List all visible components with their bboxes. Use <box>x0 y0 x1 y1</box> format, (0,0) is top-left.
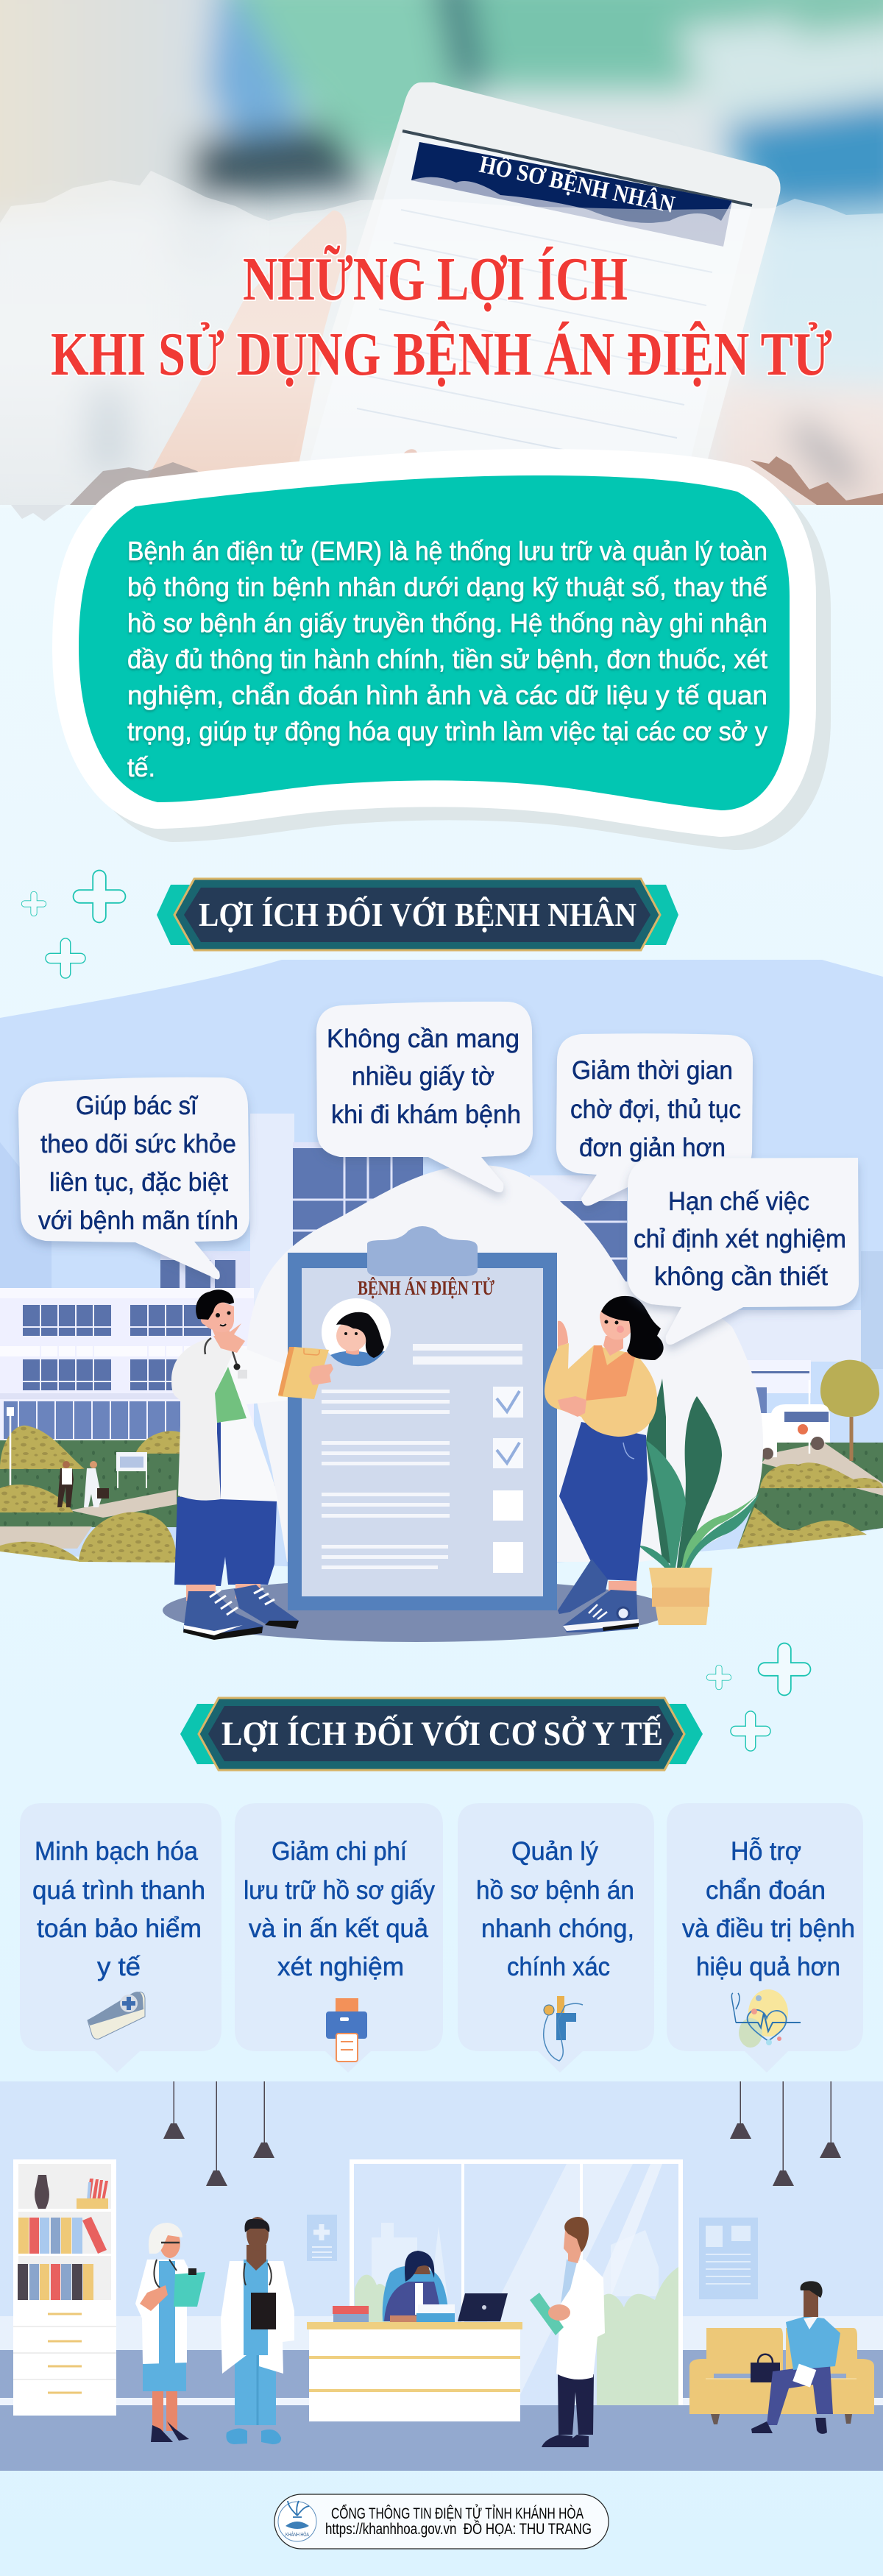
card 4: effective diagnosis and treatment: Hỗ trợ <box>731 1837 801 1866</box>
footer text: CỔNG THÔNG TIN ĐIỆN TỬ TỈNH KHÁNH HÒA <box>331 2505 584 2522</box>
title: NHỮNG LỢI ÍCH <box>243 244 628 314</box>
coat left <box>171 1338 234 1501</box>
speech bubble 2: nhiều giấy tờ <box>352 1062 494 1091</box>
sofa <box>689 2328 874 2424</box>
card 3: fast record management: Quản lý <box>511 1837 598 1866</box>
speech bubble 4: chỉ định xét nghiệm <box>634 1225 846 1253</box>
hand holding tablet <box>132 210 347 505</box>
intro text: bộ thông tin bệnh nhân dưới dạng kỹ thuật số, thay thế <box>127 572 767 602</box>
card 1: transparent insurance payment: toán bảo hiểm <box>37 1914 202 1943</box>
speech bubble 3: Giảm thời gian <box>572 1056 733 1085</box>
title <box>51 244 832 389</box>
footer badge <box>274 2494 609 2549</box>
intro text: Bệnh án điện tử (EMR) là hệ thống lưu trữ và quản lý toàn <box>127 536 767 566</box>
speech bubble 4: không cần thiết <box>654 1262 828 1291</box>
ambulance <box>759 1404 830 1459</box>
speech bubble 1: với bệnh mãn tính <box>38 1206 238 1235</box>
heading: benefits for healthcare facilities: LỢI ÍCH ĐỐI VỚI CƠ SỞ Y TẾ <box>221 1714 663 1753</box>
right buildings <box>717 1310 861 1424</box>
card 3: fast record management: nhanh chóng, <box>481 1914 634 1943</box>
logo: Khánh Hòa <box>278 2501 316 2541</box>
character: patient woman <box>545 1296 664 1632</box>
torn paper overlay <box>0 171 883 508</box>
head <box>603 1336 623 1356</box>
intro text: tế. <box>127 752 155 782</box>
central glass tower <box>293 1142 627 1315</box>
right coat front and arm <box>221 1347 287 1501</box>
desk <box>307 2293 522 2421</box>
icon: plus group left <box>24 877 119 973</box>
heading: benefits for healthcare facilities <box>180 1698 703 1770</box>
intro text: nghiệm, chẩn đoán hình ảnh và các dữ liệu y tế quan <box>127 680 767 710</box>
garden right <box>737 1360 883 1549</box>
card 4: effective diagnosis and treatment: và điều trị bệnh <box>682 1914 855 1943</box>
speech bubble 1: theo dõi sức khỏe <box>40 1130 236 1158</box>
shirt <box>215 1367 247 1423</box>
illustration: hospital reception <box>0 2081 883 2471</box>
folder <box>278 1347 329 1399</box>
record lines <box>322 1344 522 1569</box>
speech bubble 2 <box>316 1002 533 1192</box>
heading: benefits for patients: LỢI ÍCH ĐỐI VỚI BỆNH NHÂN <box>199 895 636 933</box>
card 2: reduced paper costs: lưu trữ hồ sơ giấy <box>244 1876 435 1905</box>
speech bubble 1: liên tục, đặc biệt <box>49 1168 228 1197</box>
intro text: đầy đủ thông tin hành chính, tiền sử bệnh, đơn thuốc, xét <box>127 644 767 674</box>
heading: benefits for patients <box>157 879 678 950</box>
icon: insurance card <box>88 1992 145 2039</box>
card 2: reduced paper costs <box>235 1803 443 2073</box>
reception window <box>350 2159 683 2405</box>
doctor: man with tablet <box>530 2217 605 2447</box>
shoes <box>558 1559 608 1614</box>
speech bubble 1: Giúp bác sĩ <box>76 1091 199 1120</box>
wall signs <box>307 2215 758 2299</box>
card 1: transparent insurance payment: quá trình thanh <box>32 1876 205 1905</box>
reception chair and receptionist <box>383 2251 449 2322</box>
head <box>212 1328 230 1343</box>
card 3: fast record management: hồ sơ bệnh án <box>476 1876 634 1905</box>
card 4: effective diagnosis and treatment: hiệu quả hơn <box>696 1953 840 1981</box>
clipboard: electronic medical record <box>288 1226 557 1610</box>
hand on belly <box>558 1396 586 1417</box>
icon: plus group right <box>709 1649 804 1746</box>
speech bubble 3 <box>556 1033 753 1206</box>
pants <box>559 1422 648 1581</box>
bookshelf <box>13 2159 116 2416</box>
speech bubble 3: chờ đợi, thủ tục <box>570 1095 741 1124</box>
speech bubble 4: Hạn chế việc <box>668 1187 809 1216</box>
card 4: effective diagnosis and treatment <box>667 1803 863 2073</box>
plant in pot <box>639 1379 760 1625</box>
sweater <box>545 1343 657 1437</box>
card 1: transparent insurance payment: y tế <box>97 1953 141 1981</box>
speech bubble 2: Không cần mang <box>327 1025 519 1053</box>
card 2: reduced paper costs: xét nghiệm <box>277 1953 404 1981</box>
intro text <box>127 536 767 782</box>
card 1: transparent insurance payment: Minh bạch hóa <box>35 1837 199 1866</box>
card 2: reduced paper costs: và in ấn kết quả <box>249 1914 429 1943</box>
pants <box>174 1418 277 1586</box>
card 2: reduced paper costs: Giảm chi phí <box>272 1837 407 1866</box>
avatar of patient <box>322 1298 391 1366</box>
large white cloud behind clipboard <box>247 1165 763 1562</box>
tiny people <box>57 1461 109 1507</box>
footer text <box>325 2505 592 2538</box>
torn bottom edge <box>11 456 883 521</box>
character: doctor with folder <box>171 1289 333 1640</box>
hand at chin <box>213 1323 245 1353</box>
hanging lamps <box>163 2081 841 2186</box>
doctor: man in scrubs <box>221 2217 294 2444</box>
card 1: transparent insurance payment <box>20 1803 221 2073</box>
hand on folder <box>309 1364 333 1385</box>
footer text: https://khanhhoa.gov.vn ĐỒ HỌA: THU TRANG <box>325 2520 592 2538</box>
card 3: fast record management: chính xác <box>507 1953 610 1981</box>
speech bubble 4 <box>628 1158 859 1345</box>
waiting man with bag <box>751 2281 840 2434</box>
icon: medical cross with cable <box>544 1996 583 2061</box>
logo: Khánh Hòa: KHÁNH HÒA <box>286 2531 309 2538</box>
speech bubble 3: đơn giản hơn <box>579 1133 726 1162</box>
stethoscope <box>205 1338 237 1365</box>
speech bubble 1 <box>18 1078 249 1279</box>
tablet header text: HỒ SƠ BỆNH NHÂN <box>477 149 678 219</box>
card 4: effective diagnosis and treatment: chẩn đoán <box>706 1876 826 1905</box>
checkboxes <box>493 1387 523 1573</box>
tablet <box>283 82 781 486</box>
card 3: fast record management <box>458 1803 654 2073</box>
icon: heart with stethoscope <box>731 1989 801 2048</box>
illustration: patient scene background <box>0 960 883 1571</box>
intro text: hồ sơ bệnh án giấy truyền thống. Hệ thống này ghi nhận <box>127 608 767 638</box>
hospital building left <box>0 1114 294 1443</box>
speech bubble 2: khi đi khám bệnh <box>331 1100 521 1129</box>
icon: printer <box>326 1998 367 2062</box>
intro text: trọng, giúp tự động hóa quy trình làm việc tại các cơ sở y <box>127 716 767 746</box>
panel: intro definition <box>79 475 804 824</box>
shoes <box>234 1585 299 1627</box>
illustration: ground shadow <box>163 1579 670 1642</box>
hero photo: tablet in hands <box>0 0 883 530</box>
raised hand <box>558 1321 568 1347</box>
doctor: elderly woman <box>135 2223 205 2442</box>
garden left <box>0 1407 180 1563</box>
clipboard title: BỆNH ÁN ĐIỆN TỬ <box>358 1277 494 1299</box>
vest <box>586 1345 636 1401</box>
